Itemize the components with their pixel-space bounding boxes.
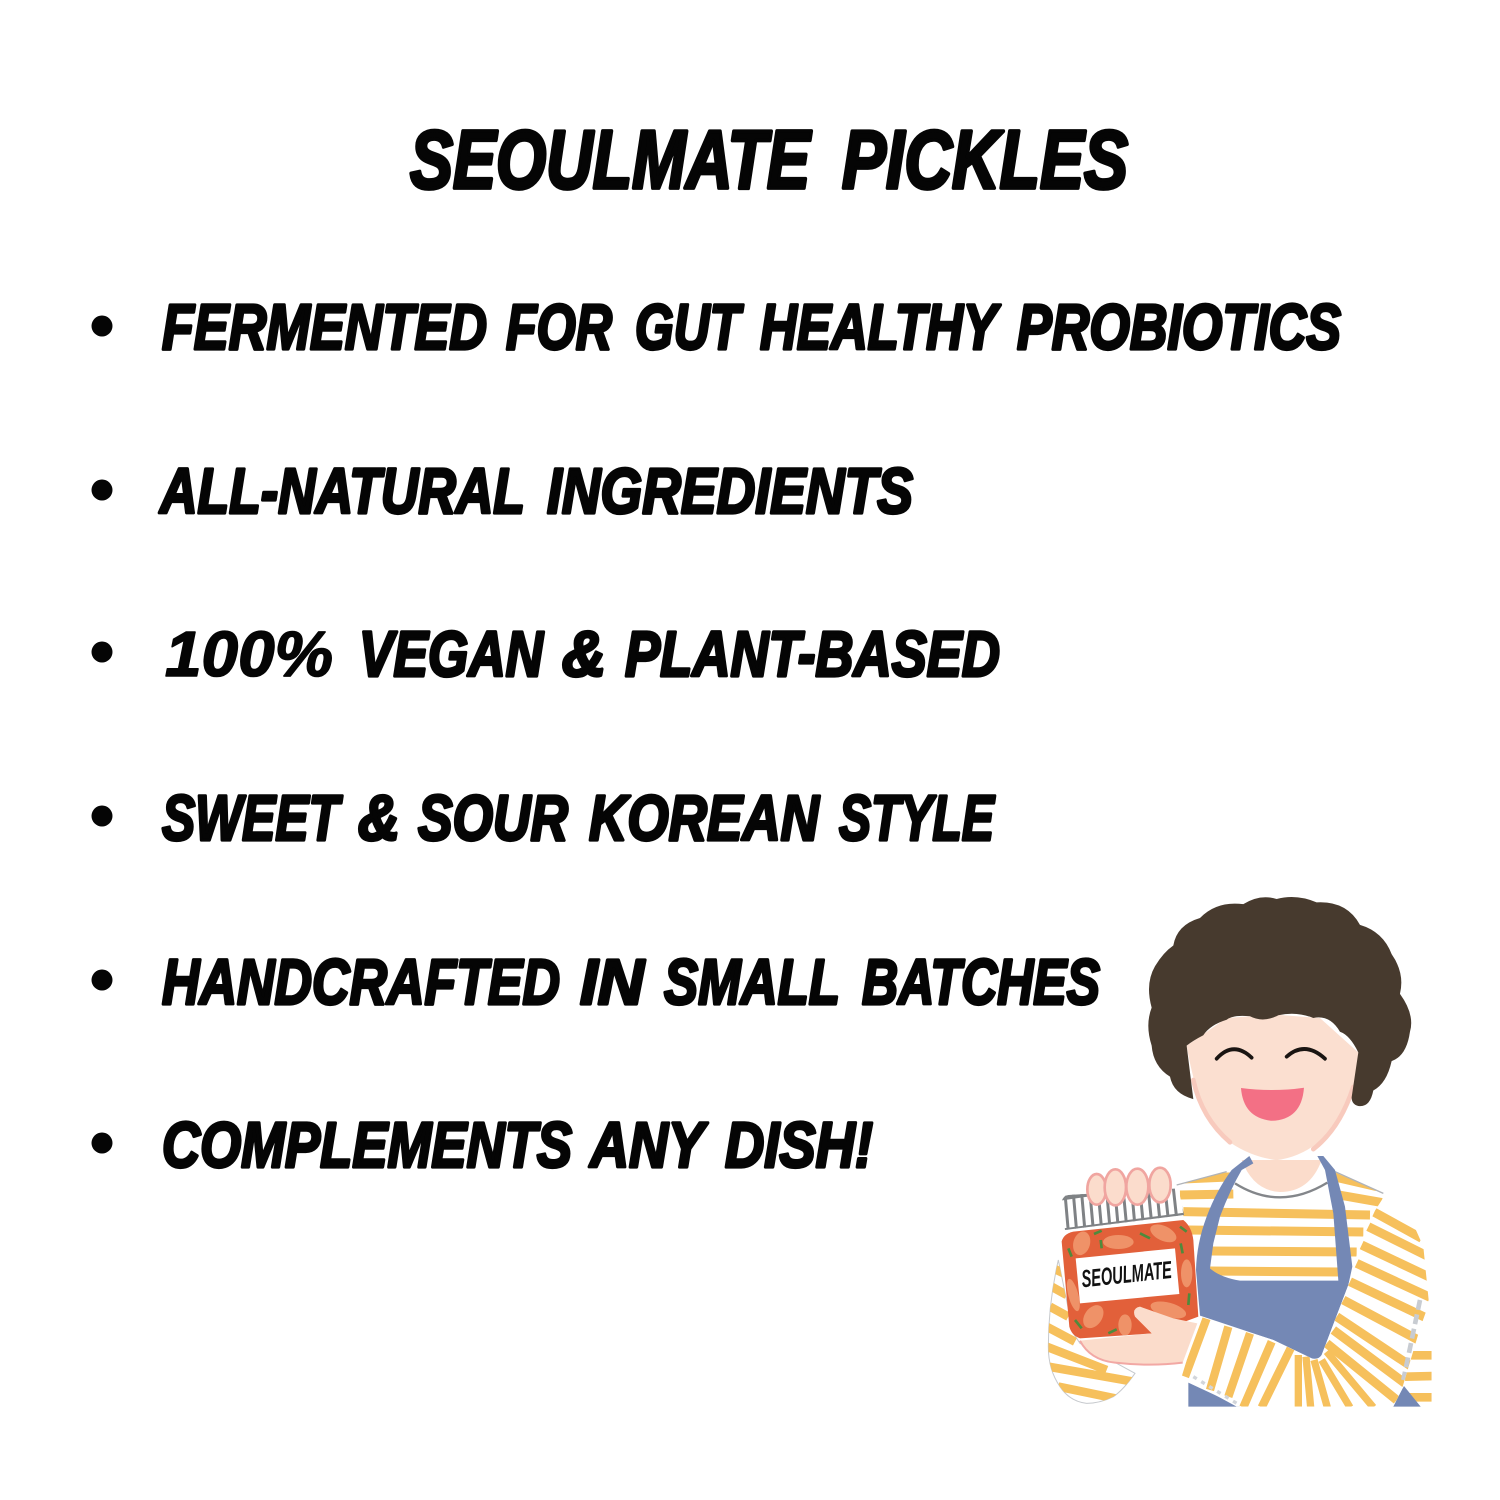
bullet: fermented: HEALTHY — [760, 291, 1001, 363]
bullet: style: SOUR — [418, 782, 568, 854]
back of shirt at right — [1405, 1351, 1432, 1402]
jar body — [1062, 1220, 1198, 1338]
bullet: fermented: PROBIOTICS — [1017, 291, 1341, 363]
bullet: complements: DISH! — [725, 1109, 873, 1181]
bullet: fermented: FOR — [506, 291, 612, 363]
illustration: woman holding jar — [1047, 897, 1433, 1407]
bullet: complements: COMPLEMENTS — [162, 1109, 572, 1181]
hair — [1148, 897, 1411, 1106]
bullet: natural — [92, 455, 913, 527]
body, apron and jar — [1047, 1156, 1433, 1407]
bullet: fermented: FERMENTED — [162, 291, 487, 363]
bullet: style: KOREAN — [589, 782, 820, 854]
bullet: style: SWEET — [162, 782, 343, 854]
bullet: natural: INGREDIENTS — [547, 455, 913, 527]
holding hand — [1080, 1307, 1197, 1365]
bullet: handcrafted: IN — [580, 946, 646, 1018]
bullet: fermented: GUT — [635, 291, 744, 363]
bullet: style: STYLE — [839, 782, 996, 854]
apron — [1188, 1156, 1421, 1407]
bullet: vegan: PLANT-BASED — [625, 618, 1000, 690]
bullet: handcrafted: BATCHES — [862, 946, 1100, 1018]
head — [1148, 897, 1411, 1160]
face — [1187, 1015, 1358, 1160]
bullet: style — [92, 782, 996, 854]
jar — [1060, 1188, 1198, 1338]
bullet list — [92, 291, 1341, 1181]
bullet: natural: ALL-NATURAL — [158, 455, 525, 527]
fingers — [1087, 1168, 1171, 1205]
bullet: vegan: 100% — [165, 618, 333, 690]
shirt torso — [1176, 1171, 1384, 1276]
jar lid — [1060, 1188, 1185, 1232]
pickles — [1064, 1221, 1192, 1336]
bullet: vegan — [92, 618, 1000, 690]
bullet: handcrafted: SMALL — [664, 946, 840, 1018]
mouth — [1241, 1088, 1304, 1121]
jar label: SEOULMATE — [1080, 1257, 1174, 1293]
bullet: handcrafted: HANDCRAFTED — [162, 946, 560, 1018]
bullet: vegan: & — [562, 618, 606, 690]
jar label — [1076, 1248, 1179, 1303]
neck and collar — [1235, 1160, 1327, 1197]
left arm sleeve — [1047, 1260, 1135, 1403]
eyes — [1217, 1049, 1325, 1059]
title: SEOULMATE — [410, 113, 812, 206]
title: PICKLES — [842, 113, 1128, 206]
blush — [1193, 1080, 1353, 1149]
bullet: complements — [92, 1109, 873, 1181]
bullet: style: & — [358, 782, 400, 854]
bullet: vegan: VEGAN — [359, 618, 544, 690]
right arm sleeve and cuff — [1182, 1195, 1430, 1407]
bullet: fermented — [92, 291, 1341, 363]
bullet: complements: ANY — [588, 1109, 708, 1181]
bullet: handcrafted — [92, 946, 1100, 1018]
